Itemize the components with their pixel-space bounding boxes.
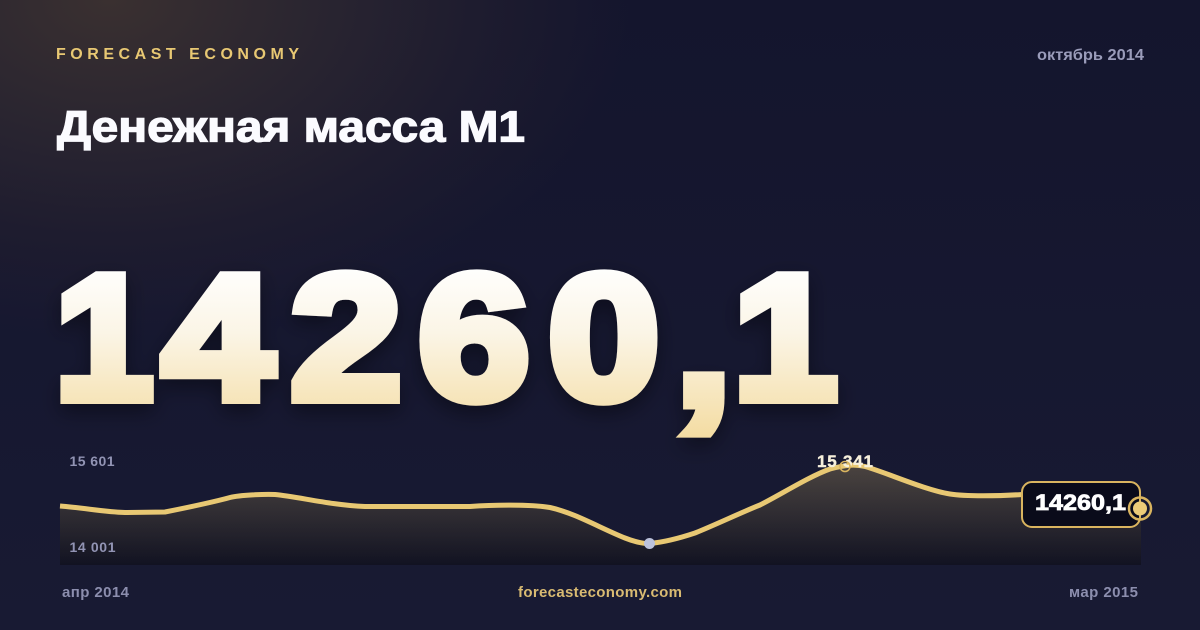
website: forecasteconomy.com [518,584,682,601]
line [60,465,1141,544]
peak value label: 15 341 [817,452,873,471]
title: Денежная масса M1 [57,102,525,152]
date: октябрь 2014 [1037,47,1144,64]
area under line [60,465,1141,565]
minimum marker [644,538,655,549]
sparkline chart [60,452,1151,565]
peak marker [840,462,850,472]
brand label: FORECAST ECONOMY [56,46,299,63]
axis min label: 14 001 [70,539,116,555]
big value: 4260 [162,239,660,437]
start date: апр 2014 [62,584,130,601]
current value callout [1022,482,1140,527]
big value [55,238,838,443]
axis max label: 15 601 [70,453,115,469]
end date: мар 2015 [1069,584,1138,601]
current value marker [1129,498,1151,520]
big value: , [675,240,732,443]
big value: 1 [55,238,153,436]
current value callout: 14260,1 [1035,490,1126,515]
big value: 1 [733,238,838,436]
